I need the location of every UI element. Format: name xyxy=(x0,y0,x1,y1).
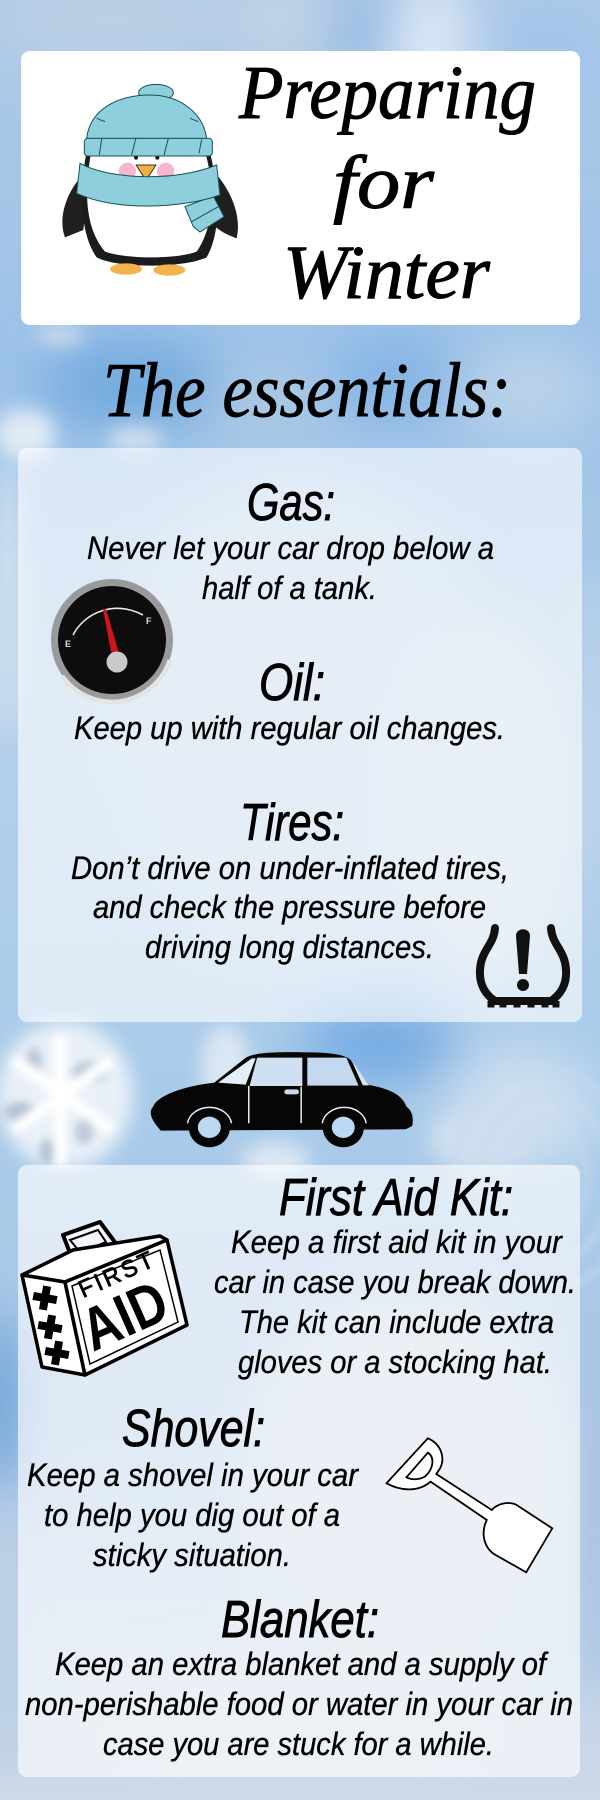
icon: black car silhouette xyxy=(151,1052,413,1147)
title: Preparing for Winter: for xyxy=(333,141,434,225)
icon: fuel gauge xyxy=(51,579,173,702)
text: shovel advice: to help you dig out of a xyxy=(44,1497,340,1533)
text: blanket advice xyxy=(25,1646,573,1762)
icon: tire pressure warning xyxy=(480,928,566,1008)
text: gas advice xyxy=(87,530,494,606)
heading: Oil: Oil: xyxy=(259,654,325,712)
panel: first aid kit, shovel and blanket xyxy=(18,1165,580,1777)
heading: First Aid Kit: First Aid Kit: xyxy=(279,1169,513,1227)
text: blanket advice: Keep an extra blanket and a supply of xyxy=(55,1646,549,1682)
icon: first aid kit: AID xyxy=(71,1267,178,1364)
text: blanket advice: case you are stuck for a while. xyxy=(103,1726,494,1762)
icon: first aid kit: FIRST xyxy=(74,1245,160,1303)
text: tires advice xyxy=(71,850,509,965)
text: first aid advice: gloves or a stocking hat. xyxy=(238,1344,552,1380)
text: tires advice: and check the pressure before xyxy=(93,889,486,925)
text: first aid advice: The kit can include extra xyxy=(239,1304,554,1340)
heading: The essentials: The essentials: xyxy=(103,347,511,433)
text: first aid advice xyxy=(214,1224,576,1380)
heading: Blanket: Blanket: xyxy=(221,1591,379,1649)
heading: Tires: Tires: xyxy=(240,794,344,852)
text: shovel advice xyxy=(27,1457,359,1573)
panel: gas, oil and tires xyxy=(18,448,582,1022)
text: oil advice: Keep up with regular oil changes. xyxy=(74,710,505,746)
text: tires advice: Don’t drive on under-inflated tires, xyxy=(71,850,509,886)
title: Preparing for Winter: Preparing xyxy=(238,51,536,135)
title: Preparing for Winter: Winter xyxy=(283,231,490,315)
text: gas advice: Never let your car drop below a xyxy=(87,530,494,566)
text: first aid advice: Keep a first aid kit in your xyxy=(231,1224,563,1260)
heading: Shovel: Shovel: xyxy=(122,1400,265,1458)
icon: first aid kit xyxy=(22,1222,187,1375)
panel: title card xyxy=(21,51,580,325)
icon: fuel gauge: F xyxy=(146,616,152,626)
icon: penguin in winter hat and scarf xyxy=(62,84,238,276)
title: Preparing for Winter xyxy=(238,51,536,315)
icon: fuel gauge: E xyxy=(65,639,71,649)
text: shovel advice: Keep a shovel in your car xyxy=(27,1457,359,1493)
heading: Gas: Gas: xyxy=(247,474,335,532)
text: shovel advice: sticky situation. xyxy=(93,1537,291,1573)
text: tires advice: driving long distances. xyxy=(145,929,434,965)
icon: shovel xyxy=(387,1438,552,1572)
text: gas advice: half of a tank. xyxy=(202,570,377,606)
